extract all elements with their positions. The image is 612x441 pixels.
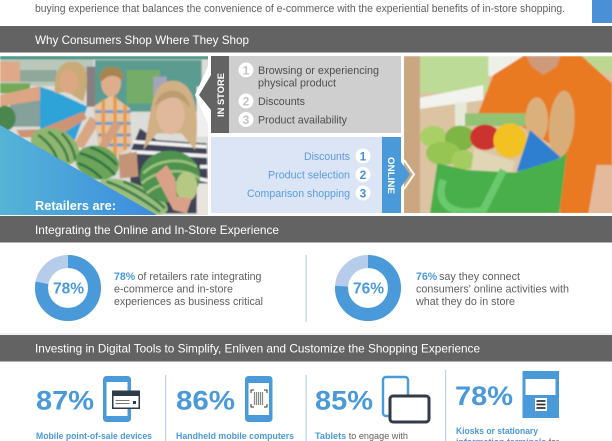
bread — [525, 97, 548, 143]
boy — [74, 116, 97, 149]
panel: online: 3 — [360, 186, 367, 200]
text: 78% of retailers: of retailers rate integrating — [138, 271, 262, 283]
stat: 85% tablets: Tablets to engage with — [315, 431, 408, 441]
bottle and box — [455, 103, 467, 126]
text: 76% say they connect: consumers' online activities with — [416, 284, 569, 296]
stat: 85% tablets: 85% — [315, 386, 373, 416]
divider — [445, 370, 446, 441]
text: 78% of retailers: experiences as business critical — [114, 296, 263, 308]
panel: online: 1 — [360, 150, 367, 164]
divider — [306, 375, 307, 441]
photo: grocery bag delivery — [400, 56, 612, 216]
shirt — [478, 56, 612, 213]
panel: in store — [199, 56, 401, 133]
panel: in store: 1 — [243, 64, 250, 78]
panel: in store: 2 — [243, 94, 250, 108]
blue triangle — [0, 125, 157, 215]
panel: online: 2 — [360, 168, 367, 182]
stat: 78% kiosks — [455, 371, 559, 441]
peppers — [470, 125, 500, 150]
stat: 87% mobile POS: Mobile point-of-sale devices — [36, 431, 152, 441]
panel: online — [211, 137, 414, 213]
section header: integrating: Integrating the Online and In-Store Experience — [35, 223, 279, 237]
panel: in store: 3 — [243, 113, 250, 127]
container — [471, 148, 515, 173]
text: 78% of retailers: 78% — [114, 271, 136, 283]
label: retailers are: Retailers are: — [35, 199, 116, 213]
icon: phone with barcode — [245, 376, 272, 422]
stat: 86% handheld — [176, 376, 294, 441]
photo: family choosing watermelons — [0, 56, 210, 222]
text: 76% say they connect: 76% — [416, 271, 438, 283]
stat: 87% mobile POS: 87% — [36, 386, 94, 416]
stat: 78% kiosks: Kiosks or stationary — [456, 426, 538, 436]
watermelons — [30, 126, 80, 165]
panel: online: ONLINE — [385, 157, 396, 194]
donut chart: 76% — [342, 262, 394, 314]
panel: in store: Discounts — [258, 96, 305, 108]
section header: integrating — [0, 216, 612, 242]
stat: 86% handheld: 86% — [176, 386, 235, 416]
panel: in store: IN STORE — [216, 73, 227, 117]
icon: tablets — [383, 377, 429, 422]
stat: 78% kiosks: 78% — [455, 381, 513, 411]
panel: in store: Browsing or experiencing — [258, 65, 379, 77]
panel: in store: physical product — [258, 78, 336, 90]
text: 76% say they connect: what they do in store — [415, 296, 515, 308]
section header: why consumers shop: Why Consumers Shop Where They Shop — [35, 33, 249, 47]
blue corner block — [592, 0, 612, 23]
stat: 86% handheld: Handheld mobile computers — [176, 431, 294, 441]
bag — [430, 153, 567, 213]
section header: investing: Investing in Digital Tools to Simplify, Enliven and Customize the Shopping Experience — [35, 342, 480, 356]
divider — [165, 375, 166, 441]
panel: online: Discounts — [304, 151, 350, 163]
panel: online: Comparison shopping — [247, 188, 350, 200]
icon: kiosk — [522, 371, 559, 418]
lettuce — [420, 126, 447, 147]
intro text: buying experience that balances the convenience of e-commerce with the experiential benefits of in-store shopping. — [35, 3, 565, 15]
girl — [128, 128, 208, 213]
woman — [0, 86, 42, 107]
text: 76% say they connect: say they connect — [439, 271, 520, 283]
donut chart: 78% — [42, 262, 94, 314]
online tab with arrow — [382, 137, 410, 213]
section header: why consumers shop — [0, 26, 612, 52]
icon: phone with card — [103, 376, 140, 422]
in store tab with arrow — [199, 56, 229, 133]
stat: 85% tablets — [315, 377, 429, 441]
panel: online: Product selection — [268, 170, 350, 182]
panel: in store: Product availability — [258, 114, 348, 126]
section header: investing — [0, 335, 612, 362]
divider — [306, 255, 307, 322]
donut chart: 78%: 78% — [53, 280, 84, 298]
donut chart: 76%: 76% — [353, 280, 384, 298]
text: 78% of retailers: e-commerce and in-store — [114, 284, 233, 296]
stat: 87% mobile POS — [36, 376, 152, 441]
blue packet — [517, 130, 561, 172]
